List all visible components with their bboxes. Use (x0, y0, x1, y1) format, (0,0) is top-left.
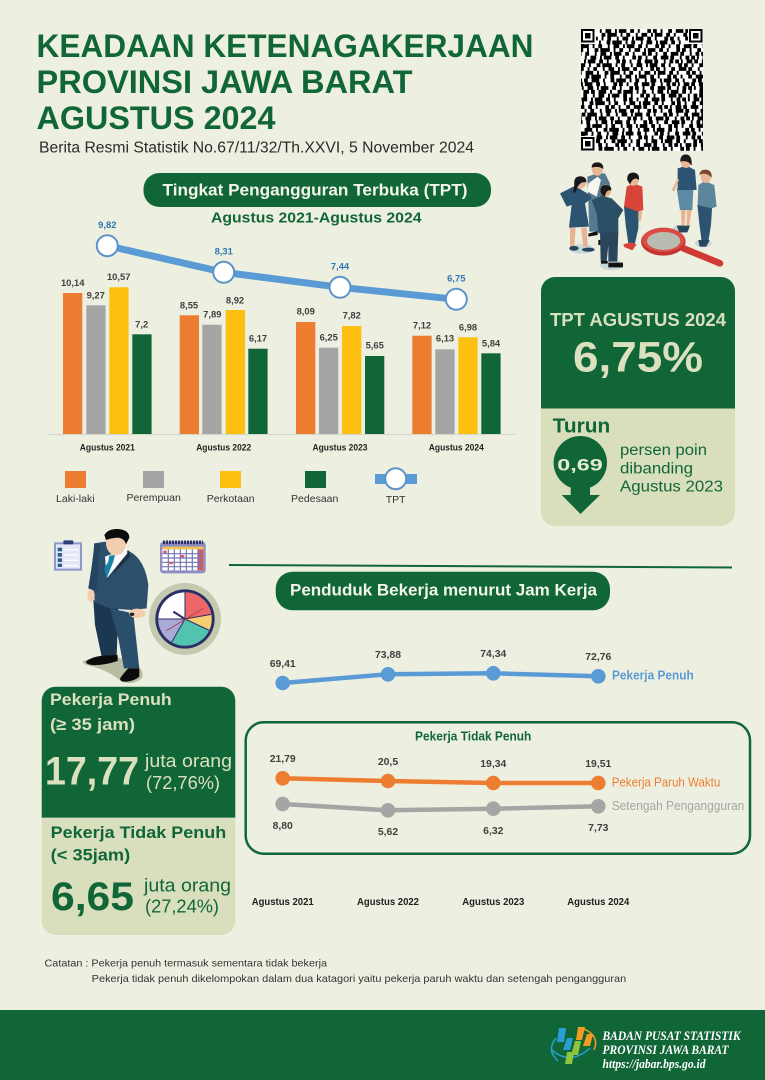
footnote (44, 958, 626, 985)
TPT line: 6,75 (447, 272, 465, 283)
unit: (72,76%) (146, 773, 220, 793)
line: Pekerja Paruh Waktu: 19,51 (585, 759, 612, 770)
line: Pekerja Paruh Waktu: 19,34 (480, 759, 507, 770)
decrease description: Agustus 2023 (620, 479, 723, 496)
bars Agustus 2022 (180, 294, 268, 453)
icon: clipboard (54, 540, 82, 571)
line: Setengah Pengangguran (273, 797, 744, 838)
label: Pekerja Tidak Penuh (51, 823, 226, 842)
line chart: Pekerja Penuh: 69,41 (270, 659, 296, 670)
bars Agustus 2023: 6,25 (320, 331, 338, 342)
agency name: https://jabar.bps.go.id (602, 1057, 706, 1071)
x-axis labels: Agustus 2022 (357, 897, 419, 908)
title (36, 28, 534, 136)
line chart: Pekerja Penuh (270, 649, 694, 690)
bars Agustus 2021: 9,27 (87, 289, 105, 300)
footnote: Pekerja tidak penuh dikelompokan dalam dua katagori yaitu pekerja paruh waktu dan setengah pengangguran (92, 973, 626, 985)
unit: juta orang (144, 751, 232, 771)
label: (≥ 35 jam) (50, 715, 135, 734)
QR code (581, 29, 703, 151)
chart legend: Perkotaan (207, 493, 255, 505)
x-axis labels (252, 897, 629, 908)
unit (143, 876, 231, 917)
line: Setengah Pengangguran: 8,80 (273, 821, 293, 832)
unit: juta orang (143, 876, 231, 896)
agency name (602, 1029, 742, 1071)
x-axis labels: Agustus 2021 (252, 897, 314, 908)
chart legend: Laki-laki (56, 493, 95, 505)
TPT line: 7,44 (331, 260, 350, 271)
pill heading: Tingkat Pengangguran Terbuka: Tingkat Pengangguran Terbuka (TPT) (162, 180, 468, 200)
line: Setengah Pengangguran: Setengah Pengangguran (612, 799, 744, 813)
bars Agustus 2023 (296, 305, 384, 453)
TPT heading: TPT AGUSTUS 2024 (550, 310, 726, 330)
illustration: businessman (83, 529, 148, 683)
bars Agustus 2023: 8,09 (297, 305, 315, 316)
icon: down arrow with 0,69: 0,69 (557, 456, 603, 475)
value: 17,77 (45, 749, 139, 793)
TPT line (97, 219, 467, 310)
decrease description: dibanding (620, 460, 693, 477)
title: AGUSTUS 2024 (36, 100, 276, 136)
chart legend: Perempuan (127, 492, 181, 504)
bar chart: TPT (48, 219, 515, 453)
agency name: PROVINSI JAWA BARAT (602, 1043, 730, 1057)
TPT line: 9,82 (98, 219, 116, 230)
icon: calendar (160, 542, 206, 573)
decrease description: persen poin (620, 442, 707, 459)
line chart: Pekerja Penuh: 72,76 (585, 652, 612, 663)
label (50, 690, 172, 734)
panel: Pekerja Penuh (42, 687, 235, 818)
line: Pekerja Paruh Waktu: Pekerja Paruh Waktu (612, 776, 720, 790)
bars Agustus 2023: 7,82 (343, 309, 361, 320)
panel: TPT Agustus 2024 (541, 277, 735, 526)
bars Agustus 2024: Agustus 2024 (429, 443, 484, 453)
label: (< 35jam) (51, 846, 130, 865)
title: KEADAAN KETENAGAKERJAAN (36, 28, 534, 64)
line: Setengah Pengangguran: 5,62 (378, 827, 398, 838)
divider line (229, 565, 732, 568)
footer band (0, 1010, 765, 1080)
pill heading: Tingkat Pengangguran Terbuka (144, 173, 491, 207)
illustration: people with magnifying glass (560, 154, 720, 270)
icon: down arrow with 0,69 (554, 436, 607, 514)
label (51, 823, 226, 865)
bars Agustus 2023: 5,65 (366, 339, 384, 350)
Turun label: Turun (553, 416, 610, 438)
x-axis labels: Agustus 2024 (567, 897, 629, 908)
line: Pekerja Paruh Waktu: 20,5 (378, 757, 398, 768)
icon: BPS logo (551, 1027, 596, 1064)
icon: clock (149, 583, 221, 655)
bars Agustus 2022: 6,17 (249, 332, 267, 343)
line chart: Pekerja Penuh: 73,88 (375, 650, 401, 661)
chart legend: TPT (386, 494, 406, 506)
bars Agustus 2022: 8,92 (226, 294, 244, 305)
line chart: Pekerja Penuh: 74,34 (480, 649, 507, 660)
bars Agustus 2021 (61, 271, 152, 453)
bars Agustus 2022: 8,55 (180, 299, 198, 310)
bars Agustus 2023: Agustus 2023 (312, 443, 368, 453)
bars Agustus 2024: 5,84 (482, 337, 501, 348)
agency name: BADAN PUSAT STATISTIK (602, 1029, 742, 1043)
line: Setengah Pengangguran: 6,32 (483, 826, 504, 837)
TPT line: 8,31 (215, 245, 233, 256)
decrease description (620, 442, 723, 496)
bars Agustus 2024: 7,12 (413, 319, 431, 330)
pill heading: Penduduk Bekerja (276, 572, 610, 610)
bars Agustus 2024: 6,13 (436, 333, 454, 344)
bars Agustus 2024: 6,98 (459, 321, 477, 332)
footnote: Catatan : Pekerja penuh termasuk sementara tidak bekerja (44, 958, 327, 970)
line: Pekerja Paruh Waktu (270, 754, 720, 790)
x-axis labels: Agustus 2023 (462, 897, 524, 908)
bars Agustus 2021: 10,57 (107, 271, 130, 282)
subtitle: Berita Resmi Statistik No.67/11/32/Th.XXVI, 5 November 2024 (39, 140, 474, 157)
panel: Pekerja Tidak Penuh chart: Pekerja Tidak Penuh (415, 730, 531, 744)
bars Agustus 2021: 10,14 (61, 277, 85, 288)
unit (144, 751, 232, 793)
chart legend (56, 468, 417, 506)
bars Agustus 2022: 7,89 (203, 308, 221, 319)
value: 6,65 (51, 875, 134, 919)
label: Pekerja Penuh (50, 690, 172, 709)
bars Agustus 2021: 7,2 (135, 318, 148, 329)
panel: Pekerja Tidak Penuh chart (246, 722, 750, 854)
bars Agustus 2024 (412, 319, 501, 453)
chart subtitle: Agustus 2021-Agustus 2024 (211, 211, 422, 227)
pill heading: Penduduk Bekerja: Penduduk Bekerja menurut Jam Kerja (290, 582, 598, 600)
line chart: Pekerja Penuh: Pekerja Penuh (612, 668, 694, 682)
bars Agustus 2022: Agustus 2022 (196, 443, 251, 453)
unit: (27,24%) (145, 897, 219, 917)
TPT value: 6,75% (573, 334, 703, 382)
chart legend: Pedesaan (291, 493, 339, 505)
line: Pekerja Paruh Waktu: 21,79 (270, 754, 296, 765)
line: Setengah Pengangguran: 7,73 (588, 823, 609, 834)
bars Agustus 2021: Agustus 2021 (80, 443, 135, 453)
panel: Pekerja Tidak Penuh (42, 818, 235, 935)
title: PROVINSI JAWA BARAT (36, 64, 413, 100)
